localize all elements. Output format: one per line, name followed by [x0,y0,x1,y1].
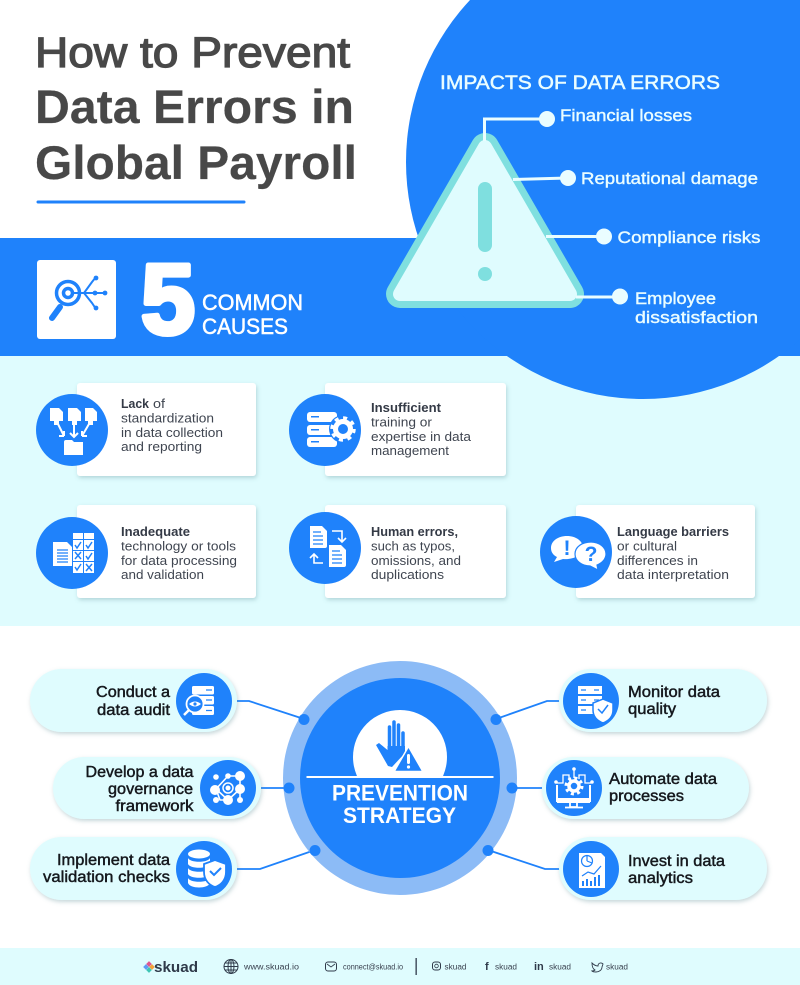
common causes heading: CAUSES [202,314,288,339]
label [43,852,170,886]
text: omissions, and [371,553,461,568]
prevention strategy label: PREVENTION [332,781,468,806]
strategy: implement validation checks [30,837,237,900]
impacts circle [406,0,800,399]
card [576,505,755,598]
label: Implement data [57,852,170,869]
prevention strategy label: STRATEGY [343,803,456,828]
prevention strategy circle [283,661,518,895]
pill [559,669,767,732]
pill [53,757,261,819]
pill [30,669,237,732]
pill [542,757,749,819]
text: duplications [371,567,445,582]
title: How to Prevent [35,29,350,77]
label [628,853,725,887]
icon: document and checklist [36,517,108,589]
icon: swapped documents [289,512,361,584]
text: such as typos, [371,538,455,554]
impact: financial losses: Financial losses [560,106,692,125]
card [325,505,506,598]
linkedin: in [534,961,544,973]
icon: server shield [563,673,619,729]
common causes heading: COMMON [202,290,303,315]
connector dots [284,714,518,856]
prevention strategy label [332,781,468,828]
text: in data collection [121,425,223,440]
strategy: automate data processes [542,757,749,819]
label: Conduct a [96,684,170,701]
linkedin: skuad [549,962,571,972]
text: and validation [121,567,204,582]
icon: speech bubbles: ? [585,543,597,566]
label: data audit [97,702,171,719]
impact: reputational damage: Reputational damage [581,169,758,188]
facebook: skuad [495,962,517,972]
email: connect@skuad.io [343,962,404,972]
connector lines: prevention [237,701,560,869]
label: Invest in data [628,853,725,870]
label: processes [609,788,684,805]
text [371,400,472,458]
impacts heading: IMPACTS OF DATA ERRORS [440,72,720,94]
connector lines [484,119,620,297]
label: framework [116,798,194,815]
icon: speech bubbles: ! [564,537,570,560]
strategy: invest in data analytics [559,837,767,900]
text [121,396,223,454]
linkedin [534,961,571,973]
strategy: conduct a data audit [30,669,237,732]
title underline [36,200,246,204]
icon: documents to folder [36,394,108,466]
website: www.skuad.io [243,962,300,972]
text: or cultural [617,538,677,554]
text [121,524,237,582]
panel: impacts of data errors [400,0,800,399]
pill [559,837,767,900]
title: Data Errors in [35,80,354,133]
text: Inadequate [121,524,190,539]
icon: network nodes [200,760,256,816]
cause: lack of standardization [36,383,256,476]
label: governance [108,781,193,798]
strategy: monitor data quality [559,669,767,732]
text: and reporting [121,439,202,454]
label [96,684,171,719]
icon: server with gear [289,394,361,466]
impact: employee dissatisfaction [612,288,758,327]
big number 5: 5 [141,244,195,354]
cause: language barriers [540,505,755,598]
common causes heading [202,290,303,339]
text [617,524,729,582]
text: of [153,396,165,411]
label: analytics [628,870,693,887]
text: standardization [121,410,214,426]
title [35,29,357,189]
card [77,505,256,598]
label: Develop a data [86,764,194,781]
text: for data processing [121,553,237,568]
label: validation checks [43,869,170,886]
cause: human errors [289,505,506,598]
label: quality [628,701,676,718]
text: training or [371,414,433,430]
text: management [371,443,449,458]
label: Automate data [609,771,717,788]
instagram: skuad [444,962,466,972]
icon: magnifier with network [37,260,116,339]
text [371,524,461,582]
skuad logo: skuad [154,959,198,976]
pill [30,837,237,900]
icon: server audit [176,673,232,729]
impact: compliance risks: Compliance risks [618,228,760,247]
facebook: f [485,961,489,973]
twitter: skuad [606,962,628,972]
facebook [485,961,517,973]
card [325,383,506,476]
footer [143,958,628,976]
email [326,962,404,972]
cause: inadequate technology [36,505,256,598]
impact: employee dissatisfaction: dissatisfaction [635,308,758,327]
impact: employee dissatisfaction: Employee [635,289,716,308]
icon: database shield [176,841,232,897]
text: Insufficient [371,400,442,415]
text: expertise in data [371,429,472,444]
label [609,771,717,805]
text: Language barriers [617,524,729,539]
icon: speech bubbles [540,516,612,588]
warning triangle icon [400,147,570,294]
text: Human errors, [371,524,458,539]
cause: insufficient training [289,383,506,476]
title: Global Payroll [35,136,357,189]
icon: monitor with gear [546,760,602,816]
card [77,383,256,476]
label: Monitor data [628,684,720,701]
text: technology or tools [121,538,237,554]
text: data interpretation [617,567,729,582]
icon: hand with warning sign [376,722,422,772]
twitter [592,962,628,972]
instagram [432,962,466,972]
strategy: develop governance framework [53,757,261,819]
text: Lack [121,396,150,411]
label [628,684,720,718]
text: differences in [617,553,698,568]
icon: analytics report [563,841,619,897]
label [86,764,194,815]
footer divider [416,958,417,975]
website [224,960,300,974]
